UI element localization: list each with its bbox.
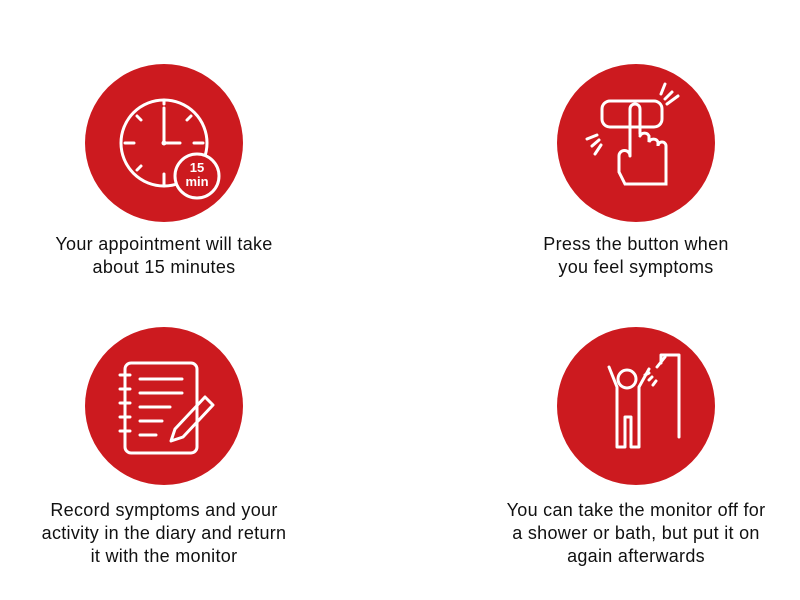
text: shower: a shower or bath, but put it on (512, 523, 760, 543)
text: appointment: Your appointment will take (55, 234, 273, 254)
icon: clock 15 min: 15 (190, 160, 204, 175)
text: button (543, 234, 729, 277)
text: appointment: about 15 minutes (93, 257, 235, 277)
icon: press button (557, 64, 715, 222)
text: appointment (55, 234, 273, 277)
text: record (42, 500, 286, 566)
text: button: you feel symptoms (558, 257, 714, 277)
text: button: Press the button when (543, 234, 729, 254)
text: shower: again afterwards (567, 546, 705, 566)
icon: clock 15 min: min (185, 174, 209, 189)
icon: diary (85, 327, 243, 485)
text: record: activity in the diary and return (42, 523, 286, 543)
icon: shower (557, 327, 715, 485)
text: record: Record symptoms and your (50, 500, 278, 520)
text: shower: You can take the monitor off for (507, 500, 765, 520)
icon: clock 15 min (85, 64, 243, 222)
text: shower (507, 500, 765, 566)
text: record: it with the monitor (91, 546, 237, 566)
